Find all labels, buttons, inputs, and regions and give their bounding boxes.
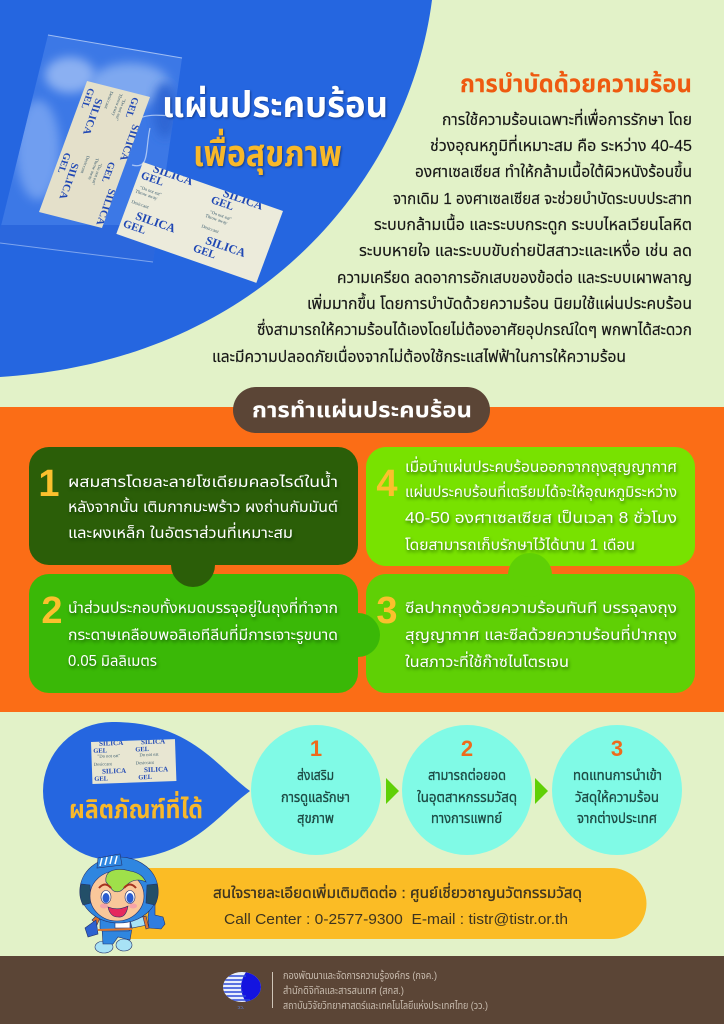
icon: silica sachet product: GEL (94, 775, 109, 783)
benefit circle 3: 3 (611, 736, 623, 761)
benefit circle 1: ส่งเสริม (297, 767, 334, 783)
benefit circle 2: สามารถต่อยอด (428, 767, 506, 783)
icon: silica sachet front: SILICA (151, 161, 195, 188)
icon: silica sachet product: Desiccant (94, 761, 113, 767)
panel: step 3: สุญญากาศ และซีลด้วยความร้อนที่ปากถุง (405, 624, 677, 644)
panel: step 1: และผงเหล็ก ในอัตราส่วนที่เหมาะสม (68, 522, 293, 542)
icon: silica sachet in bag: "Do not eat" (91, 163, 103, 186)
panel: step 4: เมื่อนำแผ่นประคบร้อนออกจากถุงสุญญากาศ (405, 456, 677, 476)
icon: silica sachet in bag: "Do not eat" (114, 98, 127, 121)
icon: silica sachet product: GEL (93, 747, 108, 755)
text block: agency names: กองพัฒนาและจัดการความรู้องค์กร (กจค.) (283, 970, 437, 982)
panel: step 2: 0.05 มิลลิเมตร (68, 653, 157, 670)
benefit circle 1: 1 (310, 736, 322, 761)
icon: silica sachet in bag: Throw away (111, 93, 124, 117)
text block: heat therapy description: ซึ่งสามารถให้ความร้อนได้เองโดยไม่ต้องอาศัยอุปกรณ์ใดๆ พกพาได้สะดวก (257, 318, 692, 339)
icon: silica sachet front (116, 157, 285, 283)
icon: silica sachet product: GEL (135, 746, 150, 753)
benefit circle 1: สุขภาพ (297, 810, 334, 827)
icon: silica sachet in bag: Throw away (87, 158, 100, 182)
icon: TISTR logo: วว. (238, 1005, 245, 1011)
text block: heat therapy description: ระบบหายใจ และระบบขับถ่ายปัสสาวะและเหงื่อ เช่น ลด (359, 239, 692, 260)
text: contact center: สนใจรายละเอียดเพิ่มเติมติดต่อ : ศูนย์เชี่ยวชาญนวัตกรรมวัสดุ (213, 882, 582, 902)
text: call center and email: Call Center : 0-2577-9300 E-mail : tistr@tistr.or.th (224, 911, 568, 928)
icon: silica sachet product: Desiccant (136, 760, 155, 765)
icon: silica sachet in bag: Desiccant (103, 91, 114, 110)
benefit circle 3: ทดแทนการนำเข้า (573, 767, 662, 783)
divider (272, 972, 273, 1008)
panel: step 2: นำส่วนประกอบทั้งหมดบรรจุอยู่ในถุงที่ทำจาก (68, 597, 338, 617)
icon: silica sachet product: SILICA (99, 739, 123, 748)
benefit circle 2: 2 (461, 736, 473, 761)
number 2: 2 (41, 590, 63, 632)
panel: step 3: ในสภาวะที่ใช้ก๊าซไนโตรเจน (405, 651, 569, 671)
icon: silica sachet product: GEL (138, 774, 153, 781)
icon: silica sachet front: Desiccant (131, 199, 150, 210)
benefit circle 2 (402, 725, 532, 855)
panel: step 4: แผ่นประคบร้อนที่เตรียมได้จะให้อุณหภูมิระหว่าง (405, 481, 677, 501)
icon: silica sachet front: "Do not eat" (139, 185, 163, 197)
icon: silica sachet front: "Do not eat" (209, 209, 233, 222)
icon: silica sachet front: GEL (121, 218, 147, 237)
panel: step 4 (366, 447, 695, 566)
icon: silica sachet in bag: SILICA (117, 123, 142, 162)
title: main heading: เพื่อสุขภาพ (193, 128, 342, 175)
benefit circle 3: วัสดุให้ความร้อน (575, 789, 659, 806)
arrow 1 (386, 778, 399, 804)
title: main heading: แผ่นประคบร้อน (162, 84, 388, 125)
icon: silica sachet front: Desiccant (201, 223, 220, 234)
heading: making the heat pad (233, 387, 490, 433)
icon: TISTR logo (223, 972, 262, 1011)
benefit circle 3 (552, 725, 682, 855)
icon: silica sachet product: "Do not eat" (97, 753, 121, 759)
benefit circle 3: จากต่างประเทศ (577, 810, 657, 826)
panel: step 4: 40-50 องศาเซลเซียส เป็นเวลา 8 ชั่วโมง (405, 508, 677, 527)
text block: heat therapy description: ความเครียด ลดอาการอักเสบของข้อต่อ และระบบเผาพลาญ (337, 269, 692, 287)
icon: silica sachet in bag: GEL (99, 161, 117, 184)
benefit circle 2: ทางการแพทย์ (431, 810, 502, 826)
text block: agency names (283, 970, 488, 1012)
number 4: 4 (376, 463, 398, 505)
panel: step 2: กระดาษเคลือบพอลิเอทีลีนที่มีการเจาะรูขนาด (68, 624, 338, 644)
icon: silica sachet front: Throw away (205, 213, 229, 226)
panel: blue header shape (0, 0, 432, 377)
text block: heat therapy description: การใช้ความร้อนเฉพาะที่เพื่อการรักษา โดย (442, 108, 692, 129)
icon: silica sachet in bag: SILICA (93, 188, 118, 227)
icon: silica sachet in bag: GEL (55, 151, 73, 175)
text block: agency names: สถาบันวิจัยวิทยาศาสตร์และเทคโนโลยีแห่งประเทศไทย (วว.) (283, 999, 488, 1012)
benefit circle 1 (251, 725, 381, 855)
panel: contact bar (130, 868, 646, 939)
icon: silica sachet in bag (39, 81, 152, 228)
benefit circle 1: การดูแลรักษา (281, 789, 350, 806)
icon: silica sachet front: GEL (139, 170, 165, 189)
text block: heat therapy description: และมีความปลอดภัยเนื่องจากไม่ต้องใช้กระแสไฟฟ้าในการให้ความร้อน (212, 345, 626, 366)
heading: heat therapy: การบำบัดด้วยความร้อน (460, 70, 692, 98)
icon: silica sachet product (91, 737, 176, 784)
icon: silica sachet in bag: SILICA (80, 97, 105, 136)
panel: step 3: ซีลปากถุงด้วยความร้อนทันที บรรจุลงถุง (405, 600, 677, 617)
text block: heat therapy description: ช่วงอุณหภูมิที่เหมาะสม คือ ระหว่าง 40-45 (430, 134, 692, 155)
text block: heat therapy description (212, 108, 692, 366)
panel: step 3 (366, 553, 695, 693)
icon: silica sachet product: Do not eat (139, 752, 159, 757)
panel: product teardrop (43, 722, 250, 860)
heading: products obtained: ผลิตภัณฑ์ที่ได้ (69, 791, 203, 824)
panel: orange process band (0, 407, 724, 712)
panel: footer (0, 956, 724, 1024)
icon: silica sachet in bag: GEL (123, 96, 140, 119)
panel: step 1: ผสมสารโดยละลายโซเดียมคลอไรด์ในน้ำ (68, 471, 338, 491)
title: main heading (162, 84, 388, 175)
panel: step 2 (29, 574, 380, 693)
image: plastic bag with silica sachets (0, 35, 285, 283)
icon: silica sachet front: Throw away (135, 189, 159, 201)
panel: step 1 (29, 447, 358, 587)
text block: heat therapy description: องศาเซลเซียส ทำให้กล้ามเนื้อใต้ผิวหนังร้อนขึ้น (415, 160, 692, 181)
icon: silica sachet front: GEL (209, 194, 235, 213)
icon: silica sachet front: GEL (191, 242, 217, 261)
icon: clear plastic bag (0, 35, 182, 265)
icon: silica sachet in bag: GEL (78, 87, 96, 110)
icon: silica sachet product: SILICA (144, 765, 168, 774)
arrow 2 (535, 778, 548, 804)
text block: heat therapy description: จากเดิม 1 องศาเซลเซียส จะช่วยบำบัดระบบประสาท (393, 190, 692, 208)
icon: silica sachet front: SILICA (134, 209, 178, 236)
icon: silica sachet front: SILICA (204, 233, 248, 260)
heading: making the heat pad: การทำแผ่นประคบร้อน (252, 399, 472, 422)
icon: silica sachet product: SILICA (141, 737, 165, 746)
icon: silica sachet product: SILICA (102, 767, 126, 776)
text block: agency names: สำนักดิจิทัลและสารสนเทศ (สกส.) (283, 985, 404, 997)
text block: heat therapy description: ระบบกล้ามเนื้อ และระบบกระดูก ระบบไหลเวียนโลหิต (374, 213, 692, 234)
icon: silica sachet front: SILICA (221, 186, 265, 213)
benefit circle 2: ในอุตสาหกรรมวัสดุ (417, 789, 517, 806)
icon: silica sachet in bag: Desiccant (79, 155, 91, 175)
icon: silica sachet in bag: SILICA (56, 162, 81, 201)
panel: step 4: โดยสามารถเก็บรักษาไว้ได้นาน 1 เดือน (405, 536, 635, 554)
icon: mascot (80, 854, 165, 953)
number 1: 1 (38, 463, 60, 505)
text block: heat therapy description: เพิ่มมากขึ้น โดยการบำบัดด้วยความร้อน นิยมใช้แผ่นประคบร้อน (307, 292, 692, 313)
panel: step 1: หลังจากนั้น เติมกากมะพร้าว ผงถ่านกัมมันต์ (68, 497, 338, 516)
number 3: 3 (376, 590, 398, 632)
